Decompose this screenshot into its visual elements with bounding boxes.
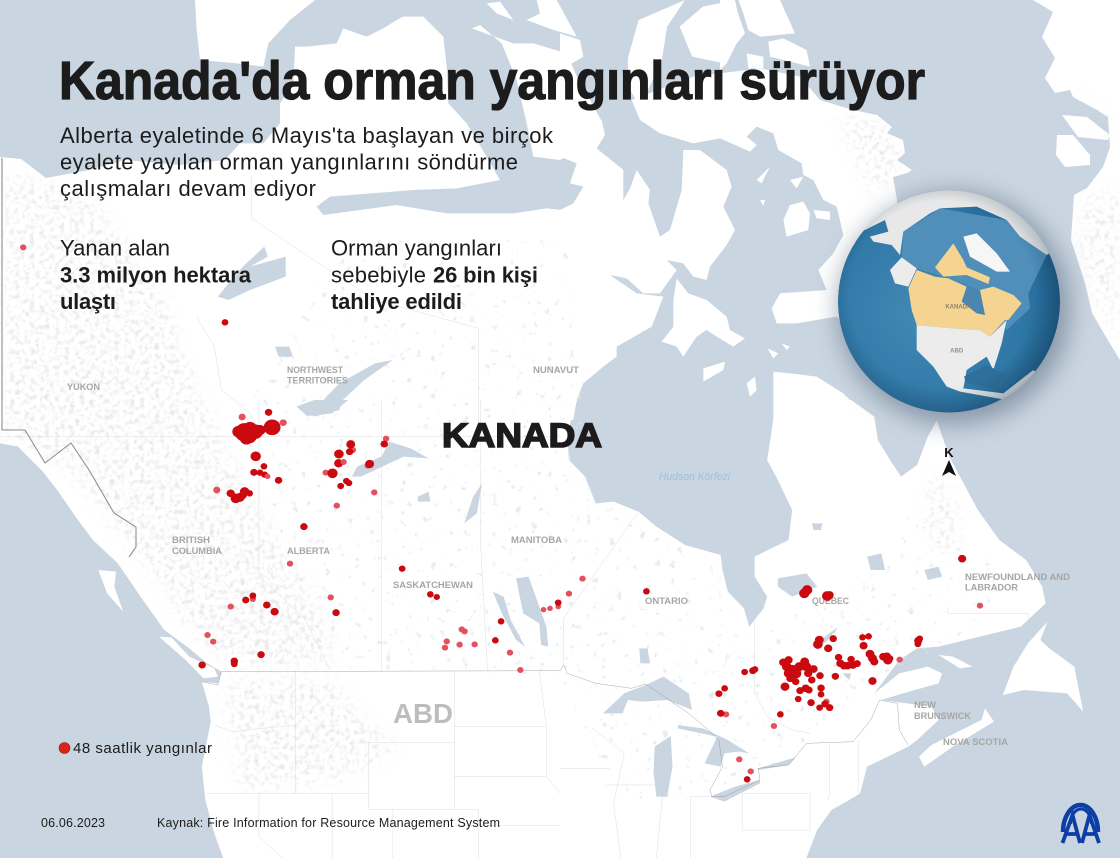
map labels: provinces and territories: YUKON [67, 382, 100, 393]
source: Kaynak: Fire Information for Resource Management System [157, 816, 500, 830]
globe locator [838, 180, 1060, 412]
globe label: ABD: ABD [950, 349, 964, 355]
stat: evacuations [331, 236, 538, 314]
map labels: provinces and territories: BRITISH [172, 535, 210, 546]
land: High Arctic islands [628, 0, 742, 107]
fire points: north [20, 245, 228, 325]
map labels: provinces and territories: LABRADOR [965, 582, 1018, 594]
subtitle: çalışmaları devam ediyor [60, 176, 316, 201]
lakes: north [218, 247, 393, 417]
globe: Canada [908, 270, 1022, 337]
globe: Arctic islands [935, 243, 990, 284]
land: northern islands near title end [720, 0, 810, 70]
map labels: provinces and territories: COLUMBIA [172, 546, 222, 557]
fire points: east [566, 555, 983, 782]
stat: evacuations: 26 bin kişi [433, 262, 538, 288]
border: Canada-USA east [560, 665, 908, 797]
map labels: provinces and territories: NEW [914, 700, 936, 711]
map: international borders [2, 158, 908, 797]
subtitle: Alberta eyaletinde 6 Mayıs'ta başlayan ve birçok [60, 123, 554, 148]
stat: burned area: ulaştı [60, 289, 116, 314]
land: northwest mainland and Arctic islands [0, 0, 601, 430]
map labels: provinces and territories: NEWFOUNDLAND AND [965, 572, 1070, 583]
title: Kanada'da orman yangınları sürüyor [59, 52, 925, 111]
map labels: provinces and territories: NOVA SCOTIA [943, 737, 1008, 748]
map labels: provinces and territories: ALBERTA [287, 546, 330, 557]
icon: north arrow: K [944, 445, 954, 460]
lakes: Great Lakes and eastern lakes [603, 523, 942, 802]
globe: Greenland [963, 233, 1010, 272]
map labels: provinces and territories: BRUNSWICK [914, 711, 971, 722]
lakes: prairies [296, 400, 548, 647]
icon: north arrow [942, 445, 956, 476]
land: Greenland [1033, 0, 1120, 360]
borders: east [560, 512, 1030, 858]
globe: Alaska [890, 257, 917, 287]
borders: west [0, 400, 560, 858]
map labels: provinces and territories: SASKATCHEWAN [393, 580, 473, 591]
globe: Russia and Arctic rim [864, 190, 1049, 255]
stat: burned area: 3.3 milyon hektara [60, 262, 252, 288]
icon: AA logo [1062, 805, 1099, 843]
map labels: provinces and territories: MANITOBA [511, 535, 562, 546]
land: western Canada and western USA [0, 400, 560, 858]
globe label: KANADA: KANADA [945, 304, 972, 310]
stat: burned area [60, 236, 252, 314]
border: Canada-USA west [202, 671, 560, 685]
globe: Arctic shelf [902, 208, 1047, 330]
globe: Gulf of Mexico [964, 365, 1007, 388]
globe: USA and Mexico [917, 320, 1040, 400]
terrain: lake speckle [200, 240, 1000, 800]
map labels: provinces and territories: NUNAVUT [533, 365, 579, 376]
globe locator shadow [838, 192, 1070, 424]
globe: Hudson Bay [962, 287, 985, 315]
globe: ocean [838, 190, 1060, 412]
borders: north [196, 177, 479, 430]
land: eastern Canada and eastern USA [560, 400, 1083, 858]
stat: burned area: Yanan alan [60, 236, 170, 260]
map labels: provinces and territories: ONTARIO [645, 596, 688, 607]
map labels: provinces and territories: NORTHWEST [287, 365, 343, 376]
stat: evacuations: tahliye edildi [331, 289, 462, 314]
fire points: west [199, 409, 561, 673]
label: ABD: ABD [393, 698, 453, 729]
map labels: provinces and territories: TERRITORIES [287, 376, 348, 386]
stat: evacuations: sebebiyle [331, 262, 426, 288]
globe: edge shade [838, 190, 1060, 412]
date: 06.06.2023 [41, 816, 105, 830]
label: KANADA: KANADA [442, 417, 602, 455]
map labels: provinces and territories: QUEBEC [812, 596, 849, 607]
subtitle [60, 123, 554, 201]
stat: evacuations: Orman yangınları [331, 236, 502, 260]
land: central Nunavut, Baffin and Southampton [560, 68, 912, 420]
label: Hudson Bay: Hudson Körfezi [659, 471, 731, 483]
map: lakes and Great Lakes [218, 247, 942, 802]
legend: 48 hour fires: 48 saatlik yangınlar [73, 740, 212, 757]
subtitle: eyalete yayılan orman yangınlarını söndürme [60, 150, 518, 174]
map labels: provinces and territories [67, 365, 1070, 748]
map: province and state borders [0, 177, 1030, 858]
border: Alaska [2, 158, 136, 557]
